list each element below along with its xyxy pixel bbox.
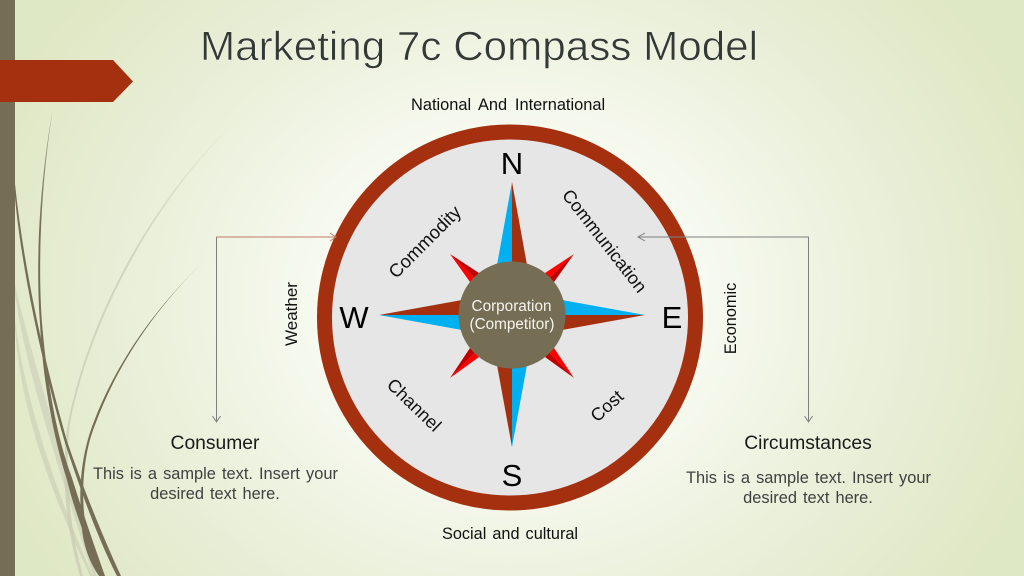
text block: Consumer: Consumer — [171, 433, 260, 454]
label: Economic: Economic — [722, 283, 740, 354]
label: Channel: Channel — [383, 375, 445, 435]
left vertical bar — [0, 0, 15, 576]
decorative grass curves — [15, 108, 239, 576]
cardinal letter E: E — [662, 300, 682, 335]
main compass points — [379, 182, 645, 447]
cardinal letter S: S — [502, 458, 522, 493]
label: Commodity: Commodity — [384, 201, 466, 282]
compass — [324, 132, 696, 503]
compass ring — [324, 132, 696, 503]
text block: Circumstances — [686, 433, 931, 507]
label: Communication: Communication — [558, 186, 651, 296]
cardinal letter N: N — [501, 146, 523, 181]
center hub: Corporation (Competitor): Corporation — [472, 298, 551, 315]
text block: Circumstances: desired text here. — [743, 489, 873, 507]
small red diagonal points — [450, 254, 574, 378]
center hub: Corporation (Competitor) — [458, 262, 566, 368]
text block: Circumstances: Circumstances — [744, 433, 872, 454]
red arrow tag — [0, 60, 133, 102]
title: Marketing 7c Compass Model — [200, 23, 758, 69]
label: Weather: Weather — [282, 282, 301, 346]
text block: Consumer: This is a sample text. Insert your — [93, 465, 338, 483]
arrow: compass to Consumer — [212, 233, 336, 422]
text block: Consumer: desired text here. — [150, 485, 280, 503]
label: National And International: National And International — [411, 96, 605, 114]
cardinal letter W: W — [339, 300, 369, 335]
label: Cost: Cost — [587, 386, 627, 426]
center hub: Corporation (Competitor): (Competitor) — [470, 316, 554, 333]
arrow: compass to Circumstances — [638, 233, 812, 422]
label: Social and cultural: Social and cultural — [442, 525, 578, 543]
text block: Circumstances: This is a sample text. Insert your — [686, 469, 931, 487]
text block: Consumer — [93, 433, 338, 503]
